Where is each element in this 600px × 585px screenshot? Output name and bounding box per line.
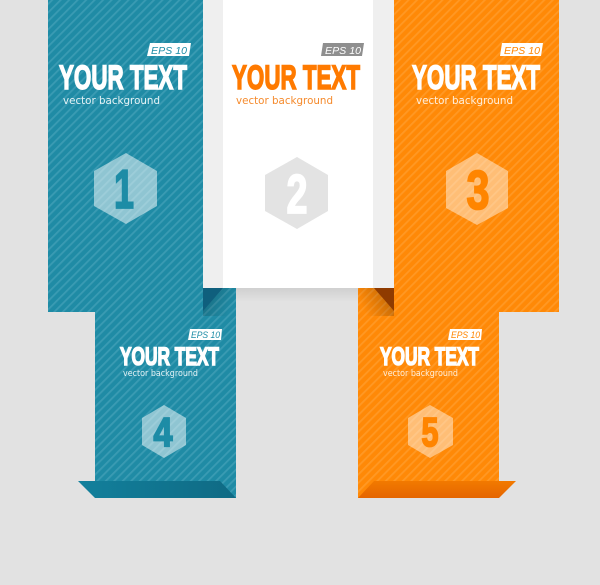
panel 1: teal ribbon: [48, 0, 203, 312]
badge: number 1: 1: [114, 158, 134, 220]
heading panel 1: YOUR TEXT: [59, 59, 187, 97]
badge: number 5: 5: [422, 409, 438, 455]
badge: number 4: 4: [154, 409, 173, 455]
panel 5: orange lower ribbon: [358, 288, 516, 498]
badge: number 5: [408, 405, 453, 458]
badge: EPS 10 panel 5: EPS 10: [451, 330, 480, 340]
badge: EPS 10 panel 1: EPS 10: [151, 45, 187, 57]
subheading panel 3: vector background: [416, 94, 513, 107]
subheading panel 4: vector background: [123, 369, 198, 379]
badge: EPS 10 panel 2: EPS 10: [325, 45, 361, 57]
panel 4: teal lower ribbon: [78, 288, 236, 498]
panel 3: orange ribbon: [394, 0, 559, 312]
badge: number 4: [142, 405, 186, 458]
fold shadow: left: [203, 288, 236, 316]
bottom fold: orange: [358, 481, 516, 498]
badge: number 3: [446, 153, 508, 225]
badge: number 2: [265, 157, 328, 229]
subheading panel 5: vector background: [383, 369, 458, 379]
heading panel 5: YOUR TEXT: [380, 343, 479, 371]
badge: number 2: 2: [286, 163, 308, 225]
badge: EPS 10 panel 1: [147, 43, 191, 57]
badge: number 1: [94, 153, 157, 224]
fold triangle: left: [203, 288, 223, 311]
shadow under panel 2: [236, 288, 358, 302]
heading panel 2: YOUR TEXT: [232, 59, 360, 97]
badge: EPS 10 panel 3: EPS 10: [504, 45, 540, 57]
bottom fold: teal: [78, 481, 236, 498]
badge: number 3: 3: [466, 159, 490, 221]
badge: EPS 10 panel 4: EPS 10: [191, 330, 220, 340]
heading panel 4: YOUR TEXT: [120, 343, 219, 371]
fold triangle: right: [374, 288, 394, 311]
panel 2: white ribbon: [203, 0, 394, 311]
fold shadow: right: [358, 288, 394, 316]
subheading panel 1: vector background: [63, 94, 160, 107]
subheading panel 2: vector background: [236, 94, 333, 107]
